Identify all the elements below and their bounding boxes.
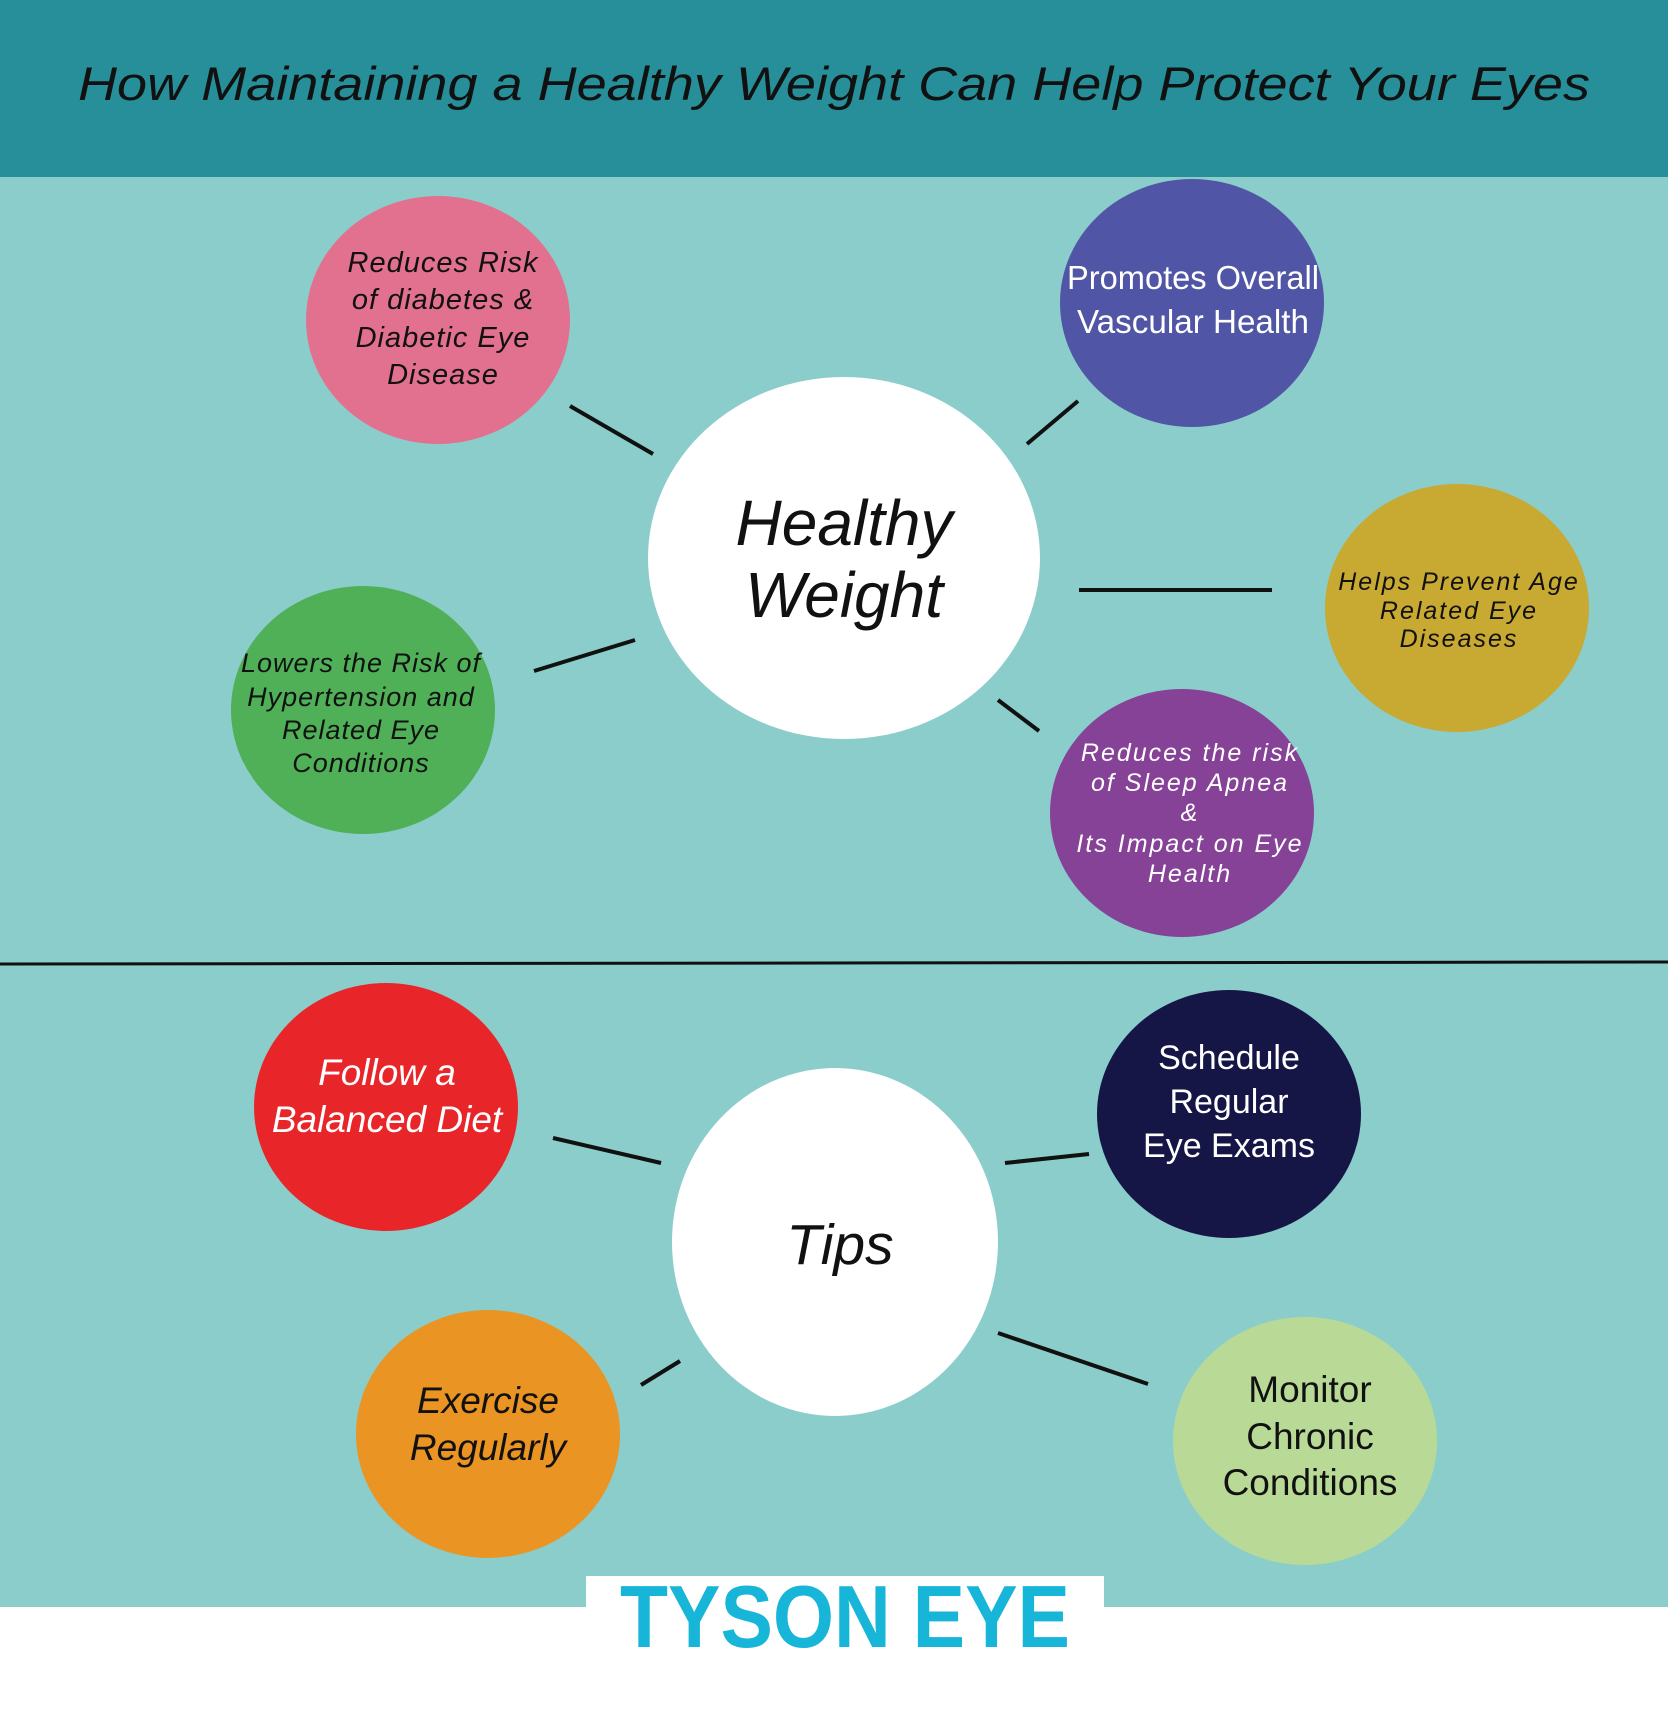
circle: age related: Related Eye bbox=[1380, 597, 1538, 625]
circle: healthy weight center: Weight bbox=[745, 559, 945, 631]
circle: eye exams bbox=[1097, 990, 1361, 1238]
connector lines: tips bbox=[553, 1138, 1148, 1385]
circle: sleep apnea: of Sleep Apnea bbox=[1091, 769, 1289, 797]
circle: diabetes: Disease bbox=[387, 359, 499, 391]
circle: sleep apnea: Health bbox=[1148, 860, 1232, 888]
circle: hypertension: Conditions bbox=[292, 748, 430, 778]
circle: hypertension: Related Eye bbox=[282, 715, 440, 745]
connector lines: healthy weight bbox=[534, 401, 1272, 731]
circle: eye exams: Eye Exams bbox=[1143, 1127, 1315, 1165]
circle: vascular bbox=[1060, 179, 1324, 427]
circle: eye exams: Regular bbox=[1169, 1083, 1289, 1121]
circle: sleep apnea: & bbox=[1181, 799, 1199, 827]
circle: diabetes bbox=[306, 196, 570, 444]
circle: healthy weight center bbox=[648, 377, 1040, 739]
circle: chronic conditions: Chronic bbox=[1246, 1416, 1374, 1457]
circle: chronic conditions bbox=[1173, 1317, 1437, 1565]
circle: sleep apnea: Its Impact on Eye bbox=[1076, 830, 1304, 858]
circle: hypertension: Hypertension and bbox=[247, 682, 475, 712]
circle: hypertension: Lowers the Risk of bbox=[241, 648, 483, 678]
circle: age related bbox=[1325, 484, 1589, 732]
circle: hypertension bbox=[231, 586, 495, 834]
circle: vascular: Promotes Overall bbox=[1067, 259, 1319, 296]
circle: sleep apnea bbox=[1050, 689, 1314, 937]
circle: chronic conditions: Conditions bbox=[1223, 1462, 1397, 1503]
circle: exercise: Regularly bbox=[410, 1427, 569, 1468]
circle: vascular: Vascular Health bbox=[1077, 303, 1309, 340]
header banner bbox=[0, 0, 1668, 177]
circle: eye exams: Schedule bbox=[1158, 1039, 1300, 1077]
title: How Maintaining a Healthy Weight Can Help Protect Your Eyes bbox=[78, 57, 1590, 110]
circle: exercise bbox=[356, 1310, 620, 1558]
circle: balanced diet bbox=[254, 983, 518, 1231]
circle: age related: Diseases bbox=[1400, 625, 1518, 653]
circle: healthy weight center: Healthy bbox=[736, 487, 956, 559]
logo: TYSON EYE bbox=[620, 1567, 1070, 1666]
circle: balanced diet: Balanced Diet bbox=[272, 1099, 504, 1140]
circle: chronic conditions: Monitor bbox=[1248, 1369, 1372, 1410]
circle: age related: Helps Prevent Age bbox=[1338, 568, 1580, 596]
circle: balanced diet: Follow a bbox=[318, 1052, 456, 1093]
circle: diabetes: Diabetic Eye bbox=[356, 322, 530, 354]
circle: tips center: Tips bbox=[786, 1213, 894, 1277]
circle: tips center bbox=[672, 1068, 998, 1416]
circle: exercise: Exercise bbox=[417, 1380, 559, 1421]
circle: sleep apnea: Reduces the risk bbox=[1081, 739, 1299, 767]
circle: diabetes: of diabetes & bbox=[352, 284, 534, 316]
circle: diabetes: Reduces Risk bbox=[348, 247, 539, 279]
